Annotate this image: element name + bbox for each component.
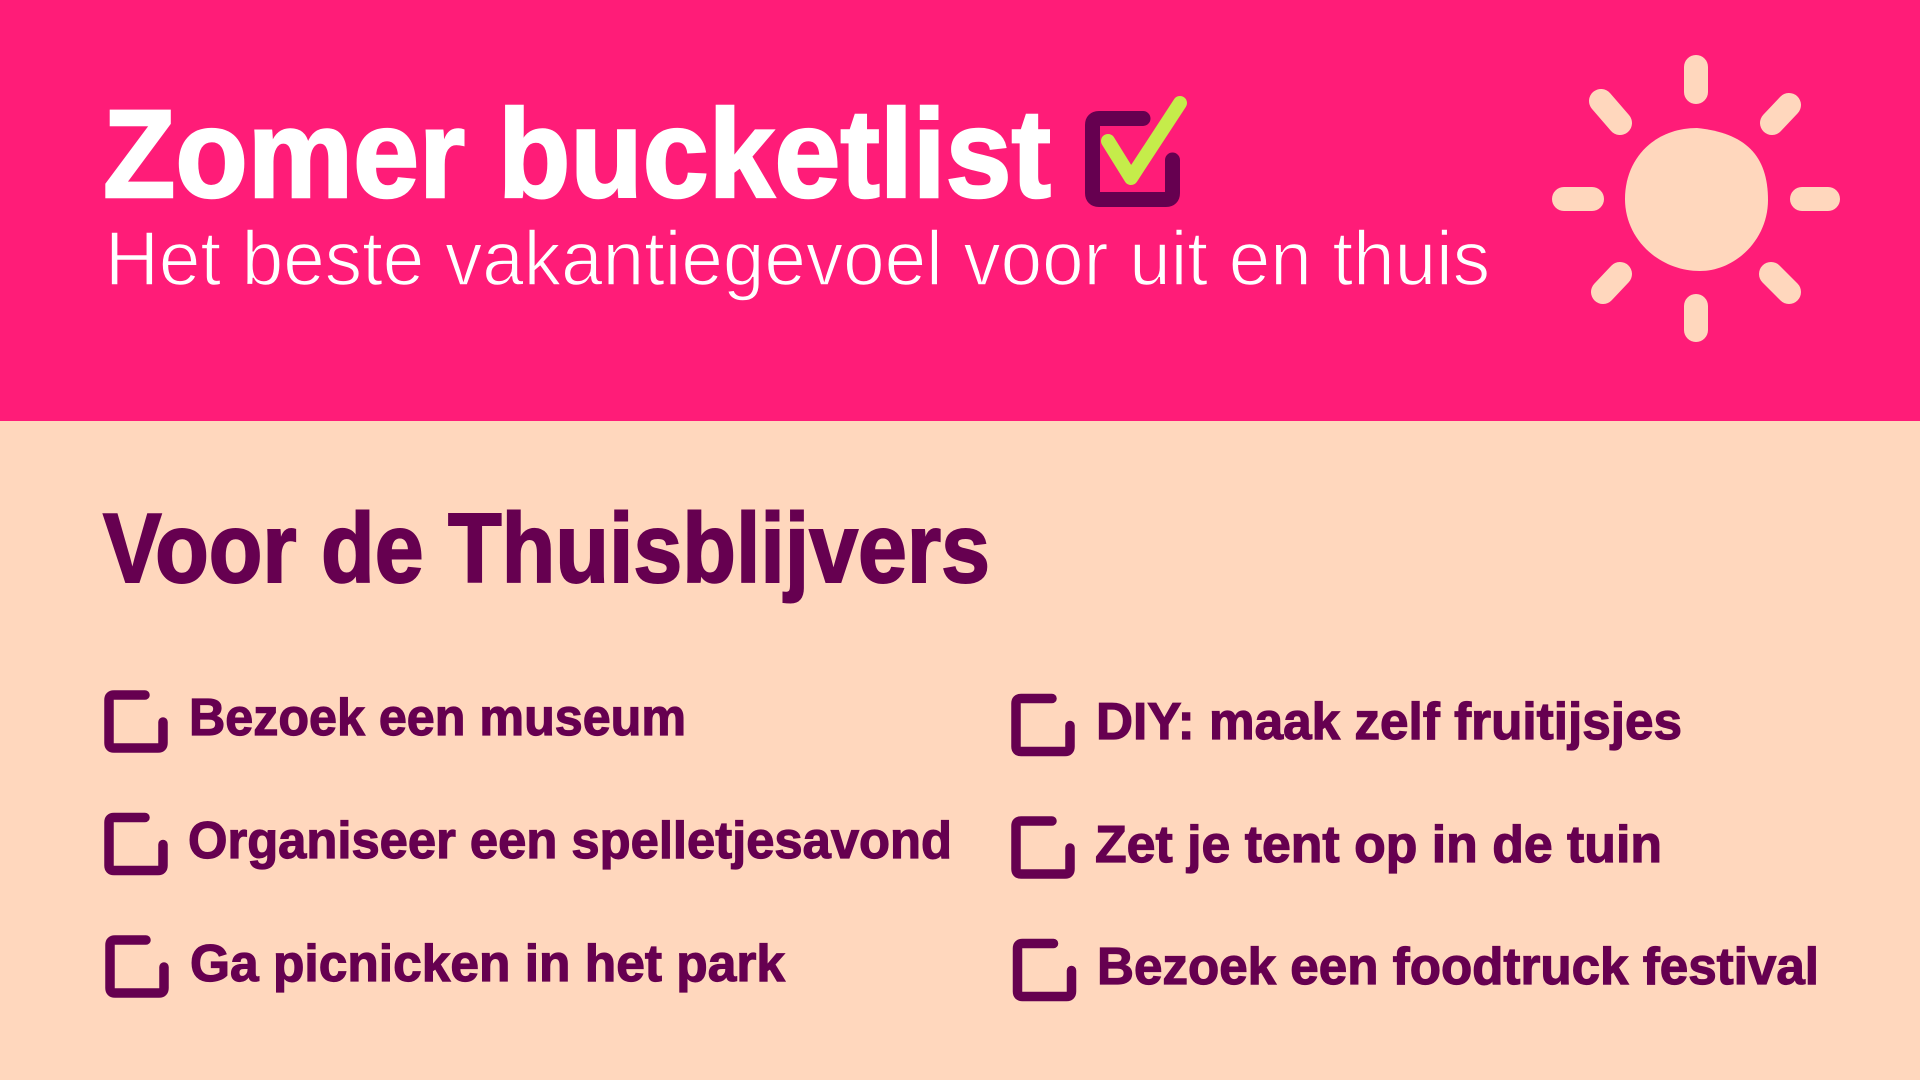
checklist item: DIY: maak zelf fruitijsjes: DIY: maak zelf fruitijsjes: [1096, 693, 1682, 751]
heading: Voor de Thuisblijvers: Voor de Thuisblijvers: [103, 493, 990, 603]
panel: pink header: [0, 0, 1920, 421]
checklist item: Bezoek een museum: Bezoek een museum: [189, 689, 686, 747]
title: Zomer bucketlist: [103, 85, 1051, 224]
checklist item: Zet je tent op in de tuin: Zet je tent op in de tuin: [1095, 816, 1662, 874]
icon: title checkbox with green check: [1092, 103, 1180, 200]
checklist item: Ga picnicken in het park: Ga picnicken in het park: [190, 935, 785, 993]
subtitle: Het beste vakantiegevoel voor uit en thuis: [105, 216, 1490, 302]
icon: sun: [1564, 67, 1828, 330]
checklist item: Organiseer een spelletjesavond: Organiseer een spelletjesavond: [188, 812, 952, 870]
checklist item: Bezoek een foodtruck festival: Bezoek een foodtruck festival: [1097, 938, 1819, 996]
